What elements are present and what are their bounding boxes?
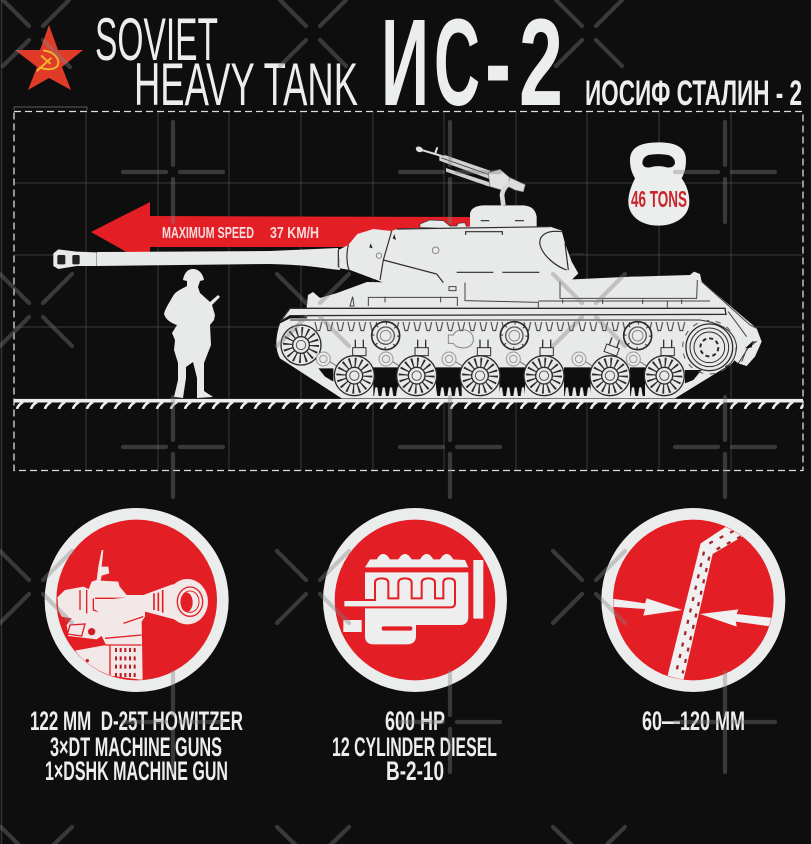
soldier silhouette [164,269,220,398]
idler [281,325,321,365]
muzzle brake [53,249,97,269]
label: engine: 600 HP [385,706,445,736]
return rollers [372,322,652,350]
title: soviet: SOVIET [95,6,218,73]
speed label: MAXIMUM SPEED [162,225,254,242]
impact arrows [610,598,682,616]
icon: kettlebell weight [628,142,689,226]
hull and tracks [276,272,762,398]
label: engine [332,706,497,786]
armour plate [667,524,747,681]
label: armament: 3×DT MACHINE GUNS [50,732,222,762]
title: heavy tank: HEAVY TANK [134,51,358,118]
rear details [702,282,757,363]
machine gun on cupola [415,146,525,205]
ground line [14,399,803,409]
engine icon [343,554,483,644]
circle: armour [601,508,785,692]
red star emblem [15,25,83,90]
circle: engine [323,508,507,692]
speed value: 37 KM/H [270,225,319,242]
fender [280,308,726,322]
track teeth [313,322,687,332]
sprocket [683,321,736,374]
road wheels [334,356,684,396]
oil tank detail [448,330,473,348]
exhaust manifold [343,578,455,607]
label: engine: 12 CYLINDER DIESEL [332,732,497,762]
track spikes [369,386,653,396]
weight label: 46 TONS [631,186,687,212]
label: armament [30,706,243,786]
gun barrel and muzzle [97,596,145,612]
label: engine: B-2-10 [386,756,444,786]
tank front view [57,585,145,680]
label: armament: 1×DSHK MACHINE GUN [45,756,228,786]
arrow: maximum speed [91,202,470,254]
suspension links [316,352,650,368]
turret [338,205,584,283]
track gaps [318,367,702,396]
label: armament: 122 MM D-25T HOWITZER [30,706,243,736]
upper hull [307,272,762,366]
spring mounts [353,336,674,356]
tank IS-2 side view [53,146,762,398]
hammer and sickle [37,51,58,71]
hull panel lines [350,280,710,307]
track outline [290,320,737,367]
circle: armament [45,508,229,692]
title: IS-2 [381,0,563,132]
gun barrel [53,248,340,270]
lower hull with track [276,318,738,398]
label: armour: 60—120 MM [642,706,745,736]
turret lines [338,221,584,283]
